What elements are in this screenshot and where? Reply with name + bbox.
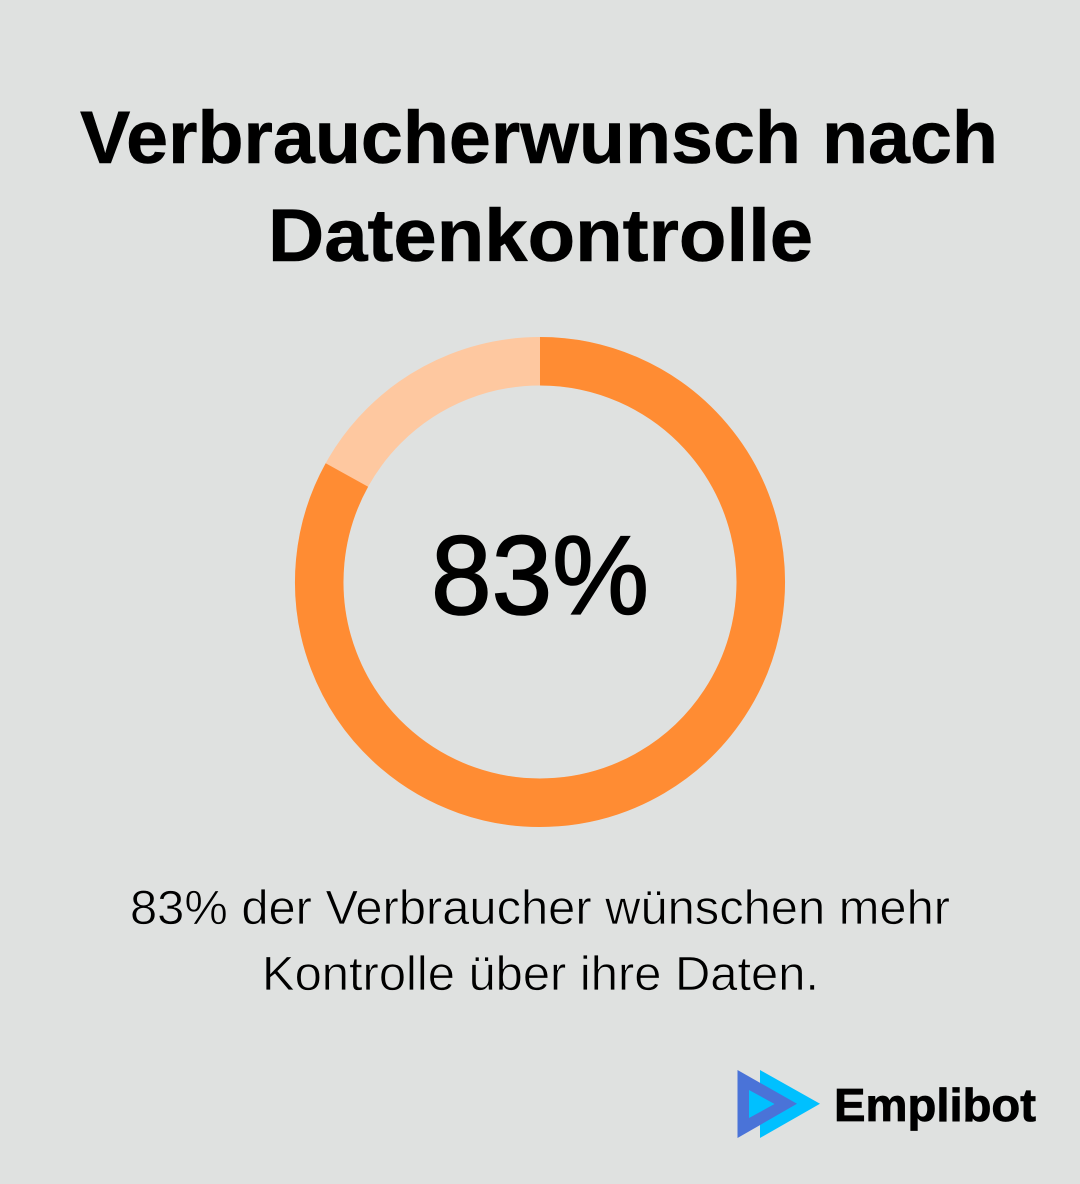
icon: play triangles	[738, 1070, 820, 1138]
description text: Kontrolle über ihre Daten.	[262, 948, 819, 1001]
brand name: Emplibot	[834, 1079, 1036, 1131]
donut chart: 83%	[319, 361, 761, 803]
title	[80, 96, 998, 277]
ring remainder segment 17%	[319, 361, 761, 803]
center value: 83%	[431, 513, 649, 638]
ring value segment 83%	[319, 361, 761, 803]
title: Datenkontrolle	[268, 194, 813, 277]
description text: 83% der Verbraucher wünschen mehr	[130, 882, 950, 935]
title: Verbraucherwunsch nach	[80, 96, 998, 179]
logo: Emplibot	[738, 1070, 1036, 1138]
description text	[130, 882, 950, 1001]
